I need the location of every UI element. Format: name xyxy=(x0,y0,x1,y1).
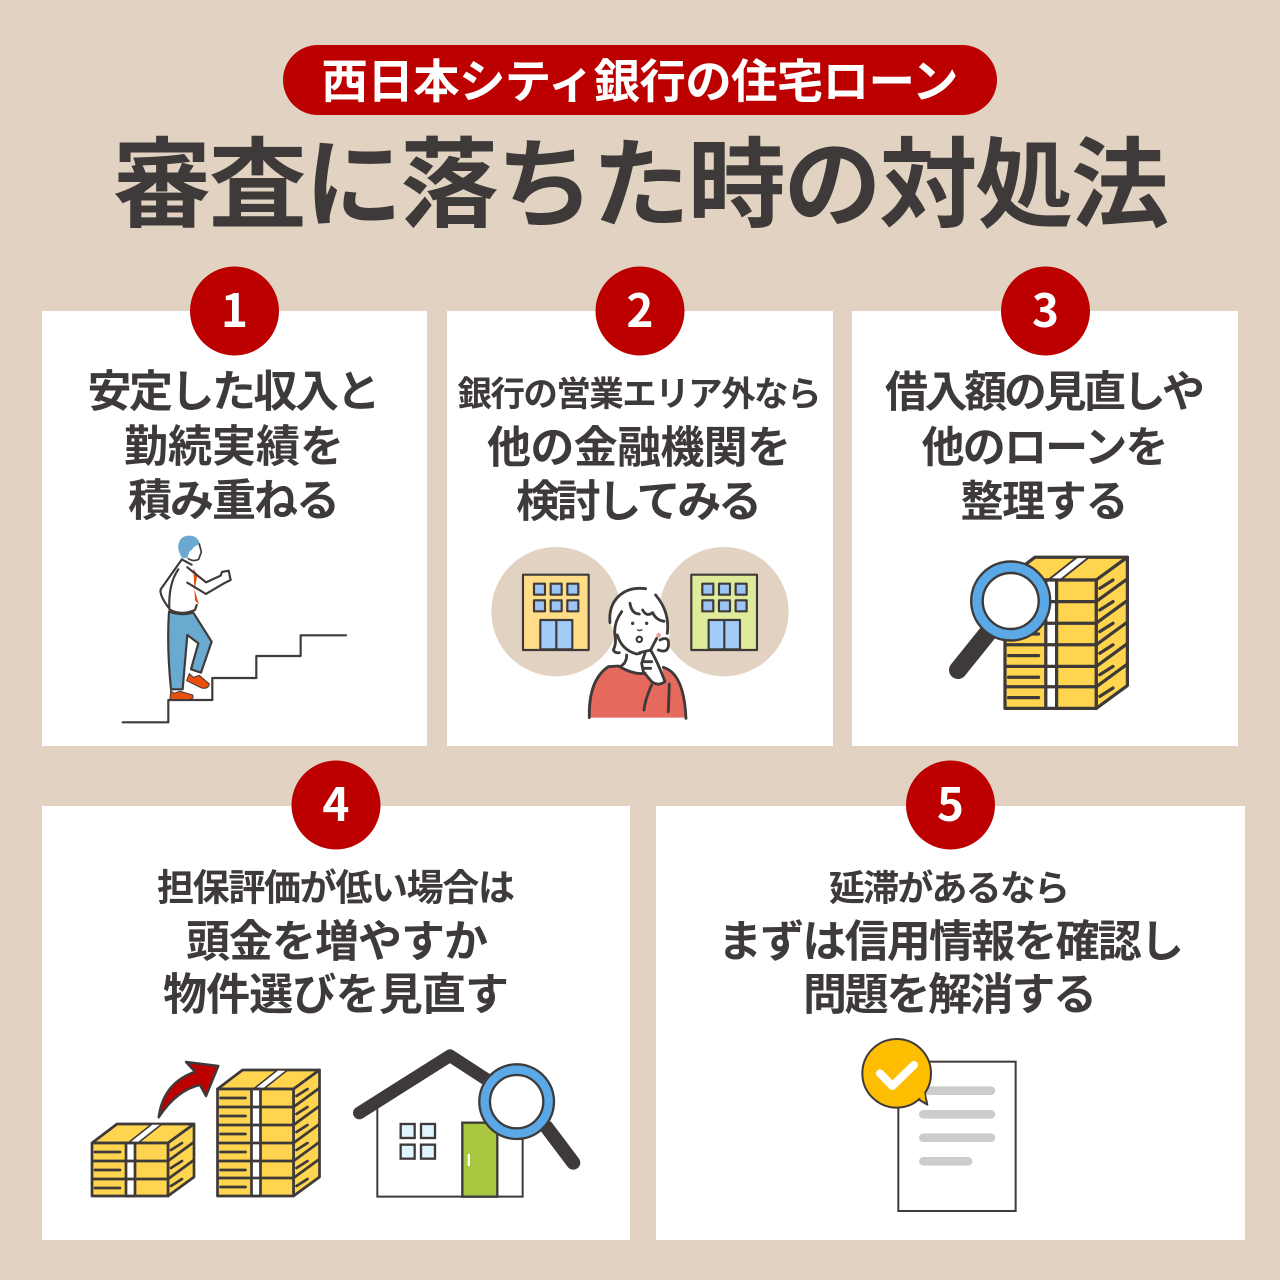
header pill: 西日本シティ銀行の住宅ローン xyxy=(322,56,958,108)
panel: 4 down payment xyxy=(42,760,630,1240)
heading 3: 他のローンを xyxy=(922,424,1168,472)
badge 3 xyxy=(1001,266,1090,356)
heading 4: 物件選びを見直す xyxy=(163,970,509,1020)
heading 1 xyxy=(88,368,380,526)
icon: document with check bubble xyxy=(862,1039,1016,1211)
badge 3: 3 xyxy=(1032,275,1059,341)
icon: house with magnifier xyxy=(359,1056,573,1197)
heading 3 xyxy=(885,369,1205,526)
badge 4: 4 xyxy=(322,769,350,835)
badge 4 xyxy=(292,760,380,850)
panel: 5 credit information xyxy=(656,760,1245,1240)
heading 5: 問題を解消する xyxy=(803,970,1097,1020)
panel: 1 stable income xyxy=(42,266,427,746)
badge 1 xyxy=(190,266,279,356)
header pill xyxy=(283,45,997,115)
icon: bundles with growth arrow xyxy=(92,1062,320,1196)
heading 2: 検討してみる xyxy=(516,478,762,526)
heading 1: 安定した収入と xyxy=(88,368,380,416)
icon: woman comparing banks xyxy=(491,547,789,718)
icon: banknote bundle with magnifier xyxy=(958,557,1127,708)
panel: 2 other banks xyxy=(447,266,833,746)
heading 1: 積み重ねる xyxy=(128,476,340,526)
heading 2: 他の金融機関を xyxy=(487,424,791,472)
badge 2 xyxy=(596,266,684,356)
heading 5: 延滞があるなら xyxy=(829,868,1070,908)
panel: 3 review loan amount xyxy=(852,266,1238,746)
heading 5 xyxy=(718,868,1184,1020)
heading 4 xyxy=(157,868,515,1020)
heading 3: 借入額の見直しや xyxy=(885,369,1205,417)
badge 2: 2 xyxy=(626,275,654,341)
heading 5: まずは信用情報を確認し xyxy=(718,918,1184,966)
heading 2: 銀行の営業エリア外なら xyxy=(458,376,822,414)
heading 4: 頭金を増やすか xyxy=(186,918,488,966)
icon: man climbing stairs xyxy=(123,536,346,722)
heading 4: 担保評価が低い場合は xyxy=(157,868,515,908)
title: 審査に落ちた時の対処法 xyxy=(113,130,1169,240)
heading 1: 勤続実績を xyxy=(124,422,344,472)
badge 5 xyxy=(906,760,995,850)
heading 3: 整理する xyxy=(960,478,1128,526)
icon: red arrow xyxy=(159,1062,218,1117)
badge 5: 5 xyxy=(937,769,964,835)
heading 2 xyxy=(458,376,822,526)
badge 1: 1 xyxy=(221,275,248,341)
